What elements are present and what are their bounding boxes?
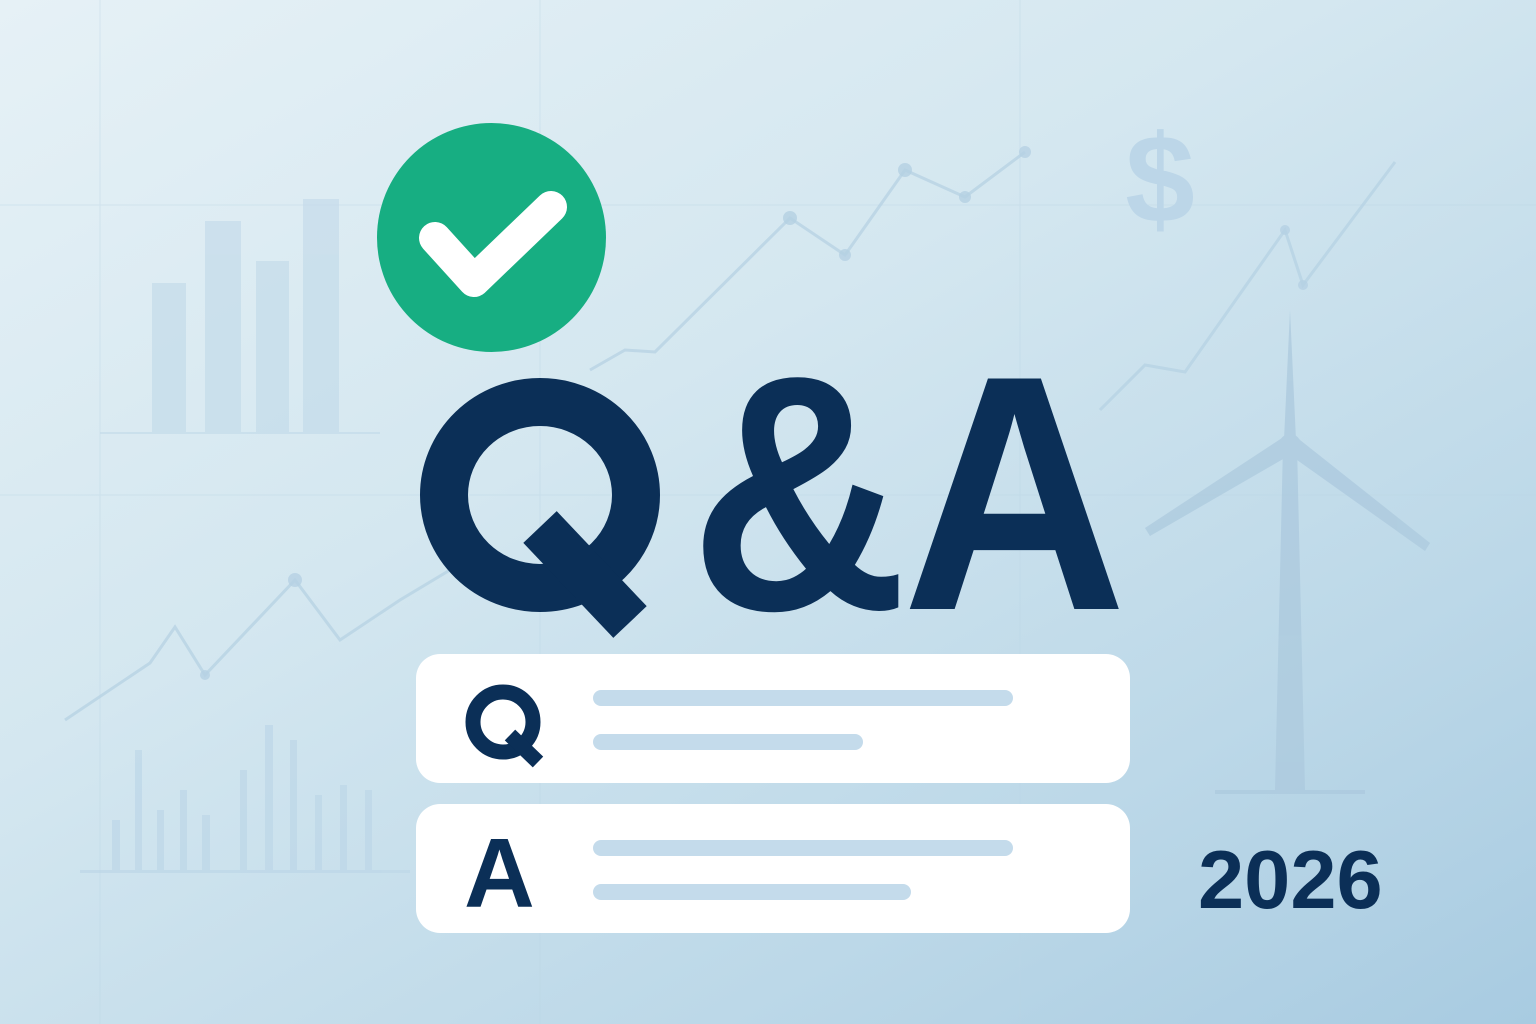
- line charts: [65, 152, 1395, 720]
- title: Q&A: &: [690, 306, 908, 680]
- bottom spikes: [80, 725, 410, 873]
- icon: green check circle: [377, 123, 606, 352]
- card: answer: [416, 804, 1130, 933]
- title: Q&A: A: [902, 306, 1127, 680]
- icon: wind turbine: [1145, 310, 1430, 794]
- card: question: [416, 654, 1130, 783]
- bar chart: [100, 199, 380, 434]
- icon: dollar: $: [1125, 110, 1195, 249]
- card: answer: A: [464, 818, 535, 928]
- title: Q&A: [420, 306, 1127, 680]
- year label: 2026: [1198, 833, 1383, 926]
